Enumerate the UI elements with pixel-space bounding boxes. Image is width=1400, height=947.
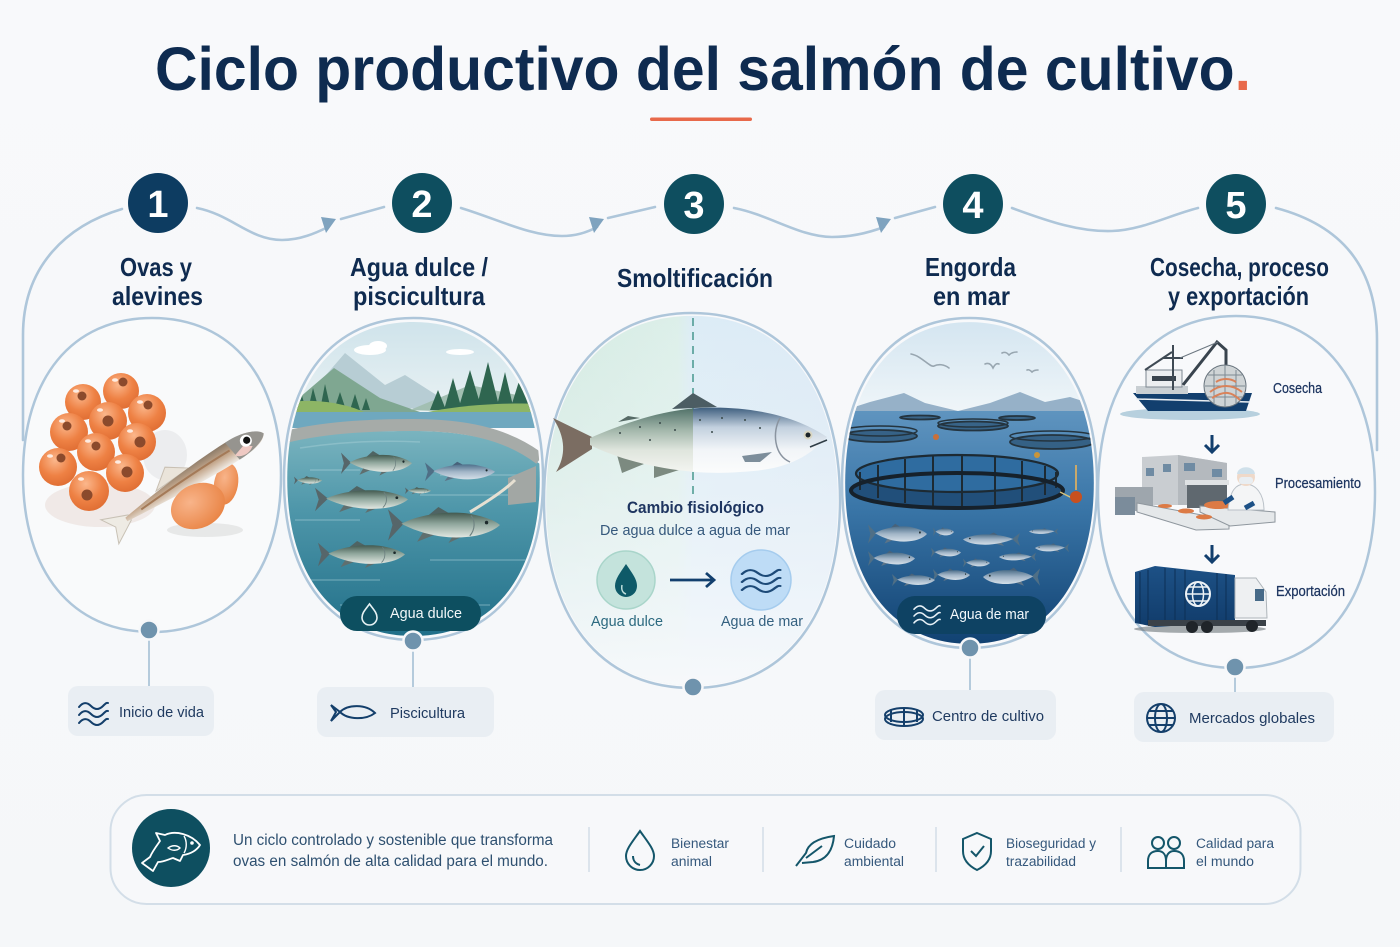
icon: leaf: [796, 836, 834, 866]
icon: sea waves: [731, 550, 791, 610]
pill: agua de mar: [897, 596, 1046, 634]
freshwater tank scene: [287, 322, 540, 636]
panel: smoltificación: [540, 310, 845, 690]
title: Ciclo productivo del salmón de cultivo.: [155, 35, 1251, 103]
step 3 number: [664, 174, 724, 234]
icon: freshwater drop: [597, 551, 655, 609]
heading step 1: Ovas y: [120, 252, 192, 282]
step 1 number: [128, 173, 188, 233]
cambio fisiológico text: Cambio fisiológico: [627, 499, 764, 517]
cambio fisiológico text: De agua dulce a agua de mar: [600, 522, 790, 539]
step 5 number: [1206, 174, 1266, 234]
panel: ovas y alevines: [23, 318, 281, 632]
icon: bienestar animal drop: [626, 831, 654, 870]
fishing boat illustration: [1120, 342, 1260, 420]
sea cages scene: [840, 315, 1100, 651]
flow line connecting the steps: [23, 207, 1377, 450]
bienestar animal: Bienestar: [671, 836, 729, 851]
label procesamiento: Procesamiento: [1275, 476, 1361, 492]
step 2 number: [392, 173, 452, 233]
step 3 number: 3: [683, 185, 705, 227]
title underline: [650, 118, 752, 121]
processing plant illustration: [1115, 455, 1275, 530]
panel: engorda en mar: [840, 315, 1100, 651]
heading step 1: alevines: [112, 281, 203, 311]
pill: agua dulce: Agua dulce: [390, 605, 462, 622]
heading step 5: [1150, 252, 1329, 311]
summary text: Un ciclo controlado y sostenible que transforma: [233, 832, 553, 849]
heading step 2: Agua dulce /: [350, 252, 488, 282]
container truck illustration: [1134, 566, 1267, 633]
panel: agua dulce / piscicultura: [280, 315, 550, 650]
heading step 4: [925, 252, 1016, 311]
bioseguridad y trazabilidad: trazabilidad: [1006, 854, 1076, 869]
step 4 number: [943, 174, 1003, 234]
heading step 5: y exportación: [1168, 281, 1309, 311]
connector nodes: [140, 620, 1244, 696]
calidad para el mundo: el mundo: [1196, 854, 1254, 869]
small cages: [843, 416, 1094, 449]
summary text: [233, 832, 553, 870]
down arrow 1: [1205, 435, 1219, 452]
pill: agua de mar: Agua de mar: [950, 606, 1029, 623]
icon: people: [1148, 837, 1184, 868]
label exportación: Exportación: [1276, 584, 1345, 600]
tag: inicio de vida: [68, 686, 214, 736]
heading step 4: Engorda: [925, 252, 1016, 282]
label cosecha: Cosecha: [1273, 381, 1323, 397]
bioseguridad y trazabilidad: Bioseguridad y: [1006, 836, 1096, 851]
cuidado ambiental: [844, 836, 904, 869]
label agua dulce: Agua dulce: [591, 614, 663, 630]
bienestar animal: animal: [671, 854, 712, 869]
connectors: [149, 638, 1235, 692]
cuidado ambiental: ambiental: [844, 854, 904, 869]
step 1 number: 1: [147, 184, 169, 226]
alevín fish with yolk sac: [95, 415, 274, 545]
main cage: [851, 434, 1082, 508]
tag: piscicultura: [317, 687, 494, 737]
tag: inicio de vida: Inicio de vida: [119, 704, 205, 721]
pill: agua dulce: [340, 596, 481, 631]
heading step 1: [112, 252, 203, 311]
tag: centro de cultivo: [875, 690, 1056, 740]
arrow freshwater to sea: [670, 573, 714, 587]
down arrow 2: [1205, 545, 1219, 562]
tag: piscicultura: Piscicultura: [390, 705, 466, 722]
panel: cosecha, proceso y exportación: [1098, 316, 1375, 668]
step 5 number: 5: [1225, 185, 1247, 227]
fish school: [868, 524, 1069, 586]
heading step 5: Cosecha, proceso: [1150, 252, 1329, 282]
cuidado ambiental: Cuidado: [844, 836, 896, 851]
tag: mercados globales: Mercados globales: [1189, 710, 1315, 727]
panel: summary footer: [110, 795, 1300, 904]
salmon half freshwater half saltwater: [553, 393, 827, 478]
cambio fisiológico text: [600, 499, 790, 539]
heading step 4: en mar: [933, 281, 1010, 311]
arrowheads on flow line: [321, 217, 891, 233]
calidad para el mundo: [1196, 836, 1274, 869]
icon: salmon badge: [132, 809, 210, 887]
eggs cluster: [39, 373, 187, 527]
summary text: ovas en salmón de alta calidad para el mundo.: [233, 853, 548, 870]
step 4 number: 4: [962, 185, 984, 227]
calidad para el mundo: Calidad para: [1196, 836, 1274, 851]
icon: shield: [963, 833, 991, 870]
heading step 2: piscicultura: [353, 281, 485, 311]
label agua de mar: Agua de mar: [721, 614, 803, 630]
step 2 number: 2: [411, 184, 433, 226]
heading step 2: [350, 252, 488, 311]
bioseguridad y trazabilidad: [1006, 836, 1096, 869]
tag: mercados globales: [1134, 692, 1334, 742]
heading step 3: Smoltificación: [617, 263, 773, 293]
dashed divider: [692, 318, 694, 494]
tag: centro de cultivo: Centro de cultivo: [932, 708, 1044, 725]
bienestar animal: [671, 836, 729, 869]
